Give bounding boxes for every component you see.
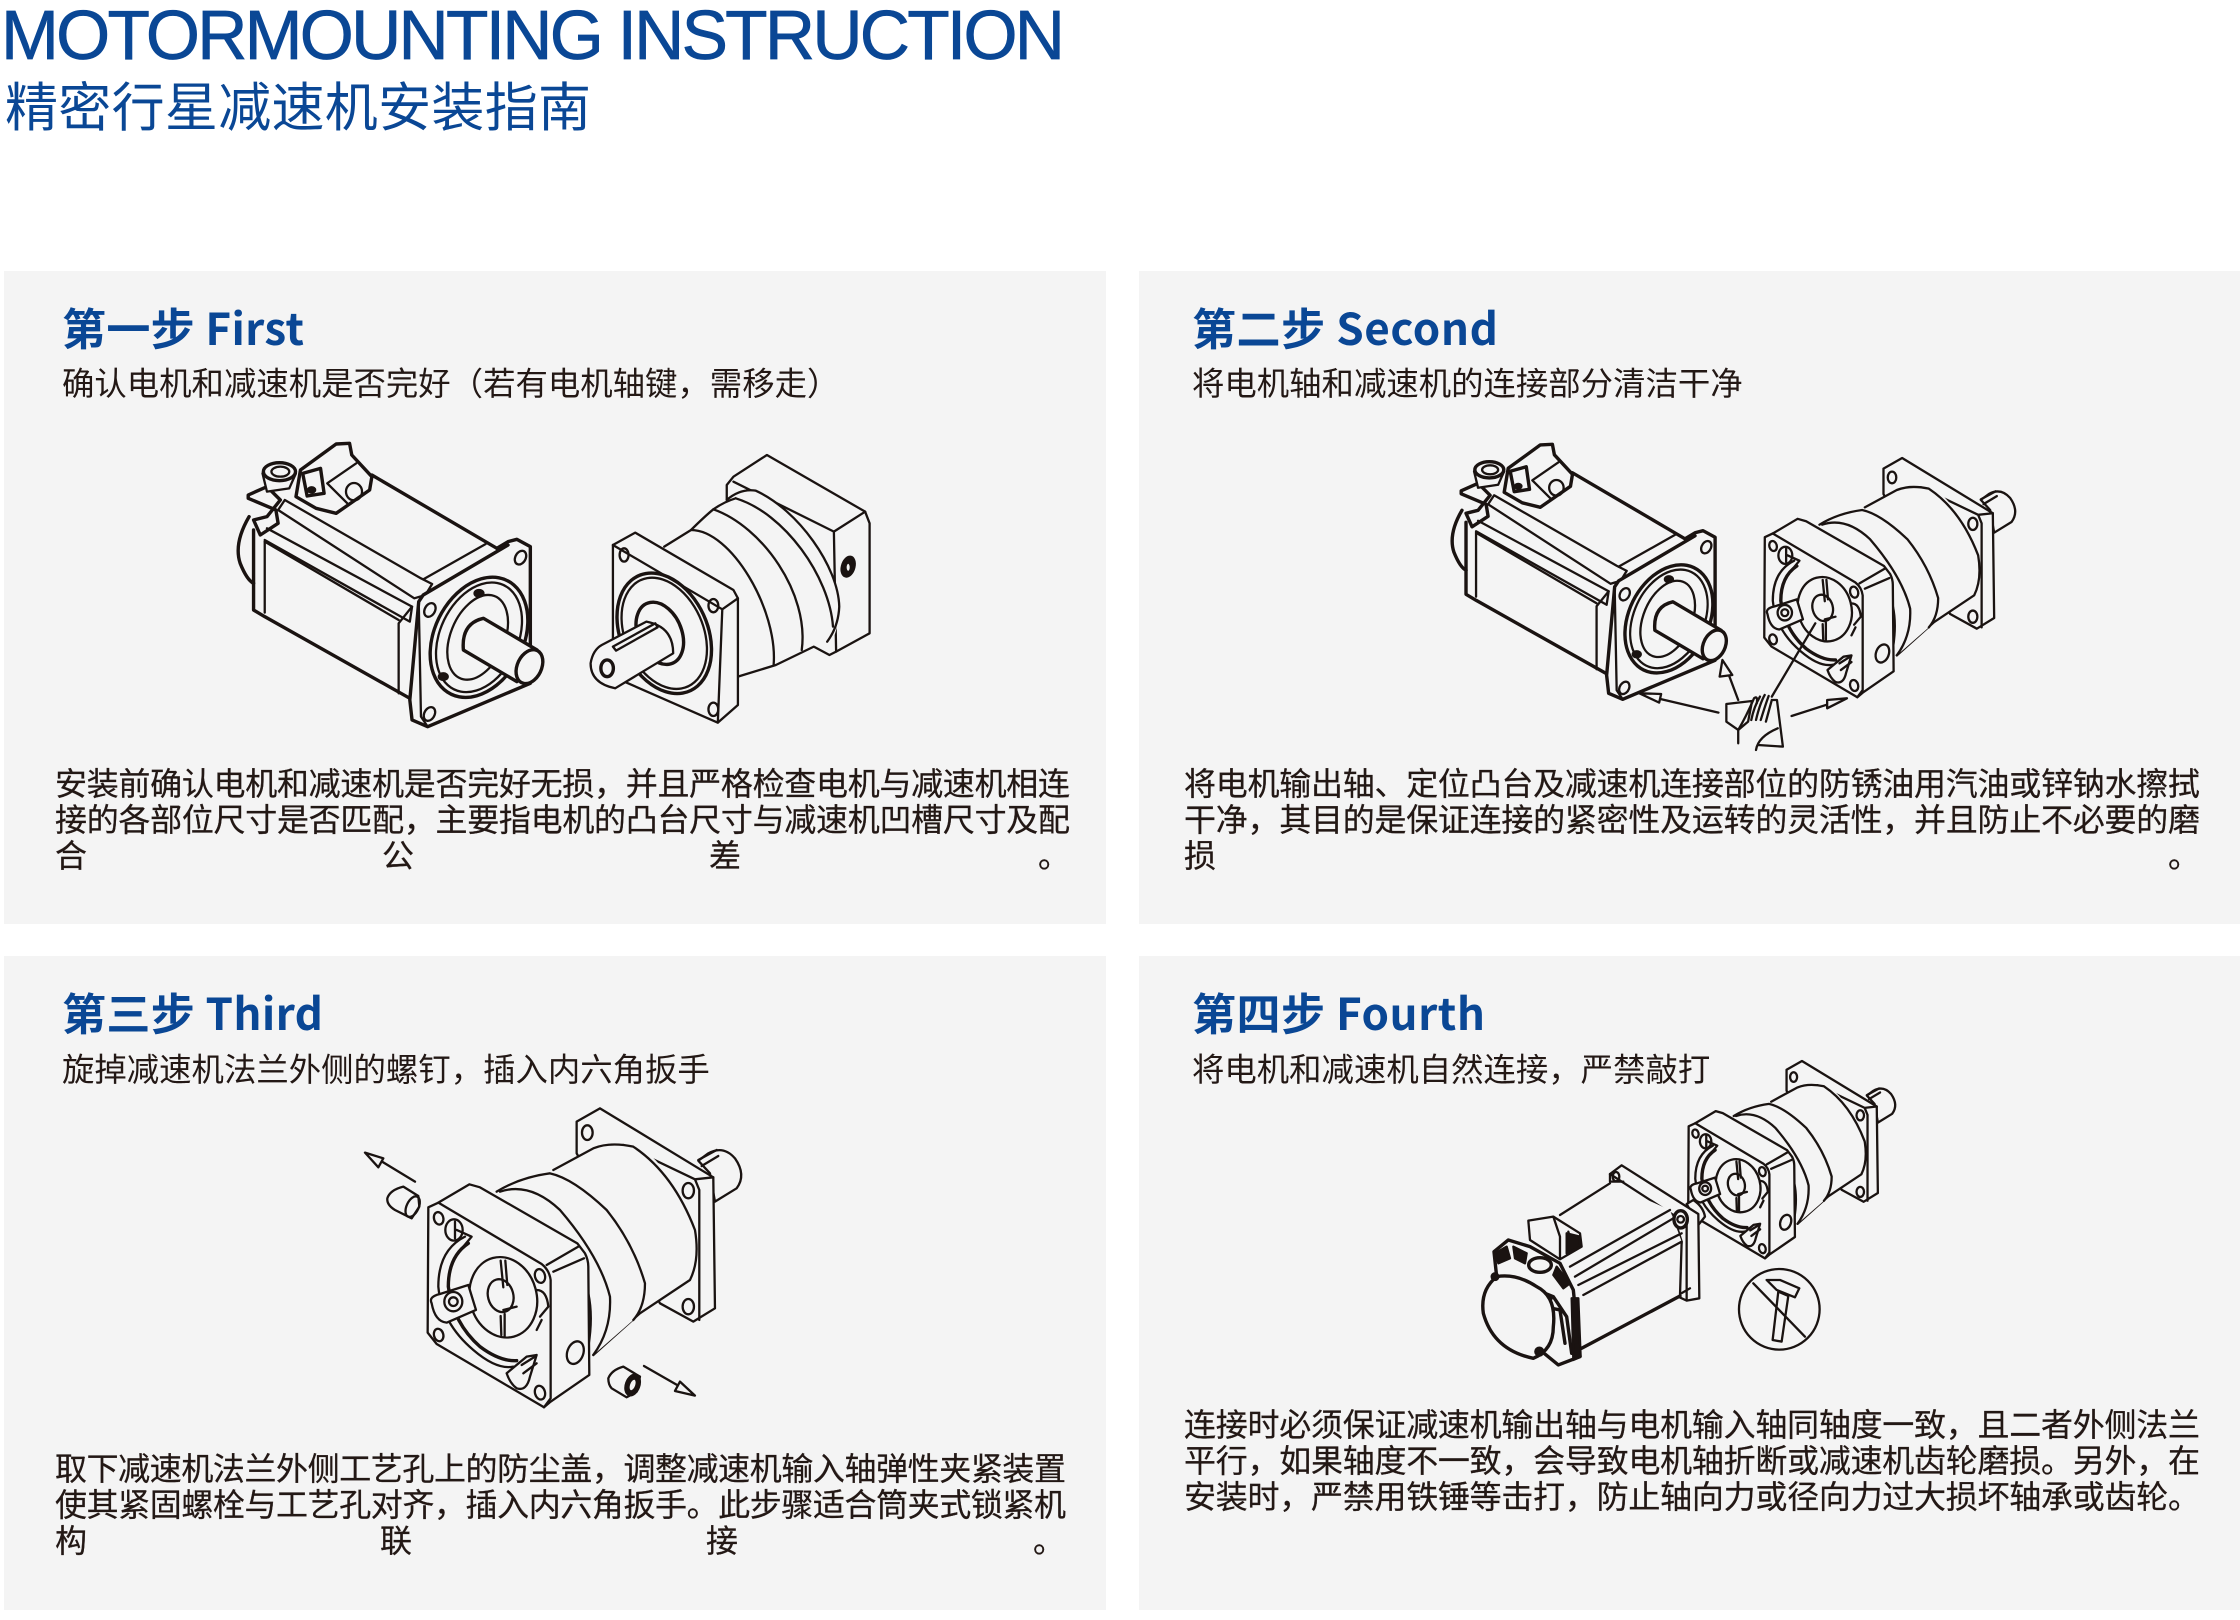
illustration: motor rear view xyxy=(1483,1165,1705,1365)
body text: step 3 xyxy=(55,1444,1066,1562)
body text: step 3: 。 xyxy=(1033,1516,1065,1562)
body text: step 4: 安装时，严禁用铁锤等击打，防止轴向力或径向力过大损坏轴承或齿轮。 xyxy=(1184,1472,2200,1518)
subheading: step 3: 旋掉减速机法兰外侧的螺钉，插入内六角扳手 xyxy=(62,1044,710,1091)
body text: step 2 xyxy=(1184,759,2200,877)
body text: step 3: 构 xyxy=(55,1516,87,1562)
body text: step 1: 合 xyxy=(55,831,87,877)
subheading: step 4: 将电机和减速机自然连接，严禁敲打 xyxy=(1192,1044,1710,1091)
body text: step 3: 联 xyxy=(380,1516,412,1562)
body text: step 2: 干净，其目的是保证连接的紧密性及运转的灵活性，并且防止不必要的磨 xyxy=(1184,795,2200,841)
heading: step 1: 第一步 First xyxy=(62,294,304,358)
illustration: reducer output side xyxy=(591,455,870,723)
body text: step 1: 差 xyxy=(709,831,741,877)
panel: step 4 xyxy=(1139,956,2240,1610)
illustration: reducer input side xyxy=(1764,458,2015,697)
body text: step 2: 损 xyxy=(1184,831,1216,877)
panel: step 2 xyxy=(1139,271,2240,924)
body text: step 3: 接 xyxy=(706,1516,738,1562)
illustration: motor xyxy=(1452,444,1730,699)
icon: upper dust cap and arrow xyxy=(365,1153,423,1219)
heading: step 2: 第二步 Second xyxy=(1192,294,1498,358)
body text: step 4: 连接时必须保证减速机输出轴与电机输入轴同轴度一致，且二者外侧法兰 xyxy=(1184,1400,2200,1446)
body text: step 1: 公 xyxy=(382,831,414,877)
illustration: reducer xyxy=(1688,1061,1895,1258)
icon: no hammering xyxy=(1739,1269,1820,1350)
subheading: step 1: 确认电机和减速机是否完好（若有电机轴键，需移走） xyxy=(62,358,839,405)
body text: step 2: 。 xyxy=(2168,831,2200,877)
heading: step 3: 第三步 Third xyxy=(62,979,323,1043)
illustration: motor xyxy=(238,443,547,727)
body text: step 1: 接的各部位尺寸是否匹配，主要指电机的凸台尺寸与减速机凹槽尺寸及配 xyxy=(55,795,1070,841)
subtitle: 精密行星减速机安装指南 xyxy=(5,66,591,142)
body text: step 2: 将电机输出轴、定位凸台及减速机连接部位的防锈油用汽油或锌钠水擦拭 xyxy=(1184,759,2200,805)
body text: step 1: 安装前确认电机和减速机是否完好无损，并且严格检查电机与减速机相连 xyxy=(55,759,1070,805)
body text: step 1: 。 xyxy=(1038,831,1070,877)
body text: step 1 xyxy=(55,759,1070,877)
body text: step 3: 使其紧固螺栓与工艺孔对齐，插入内六角扳手。此步骤适合筒夹式锁紧机 xyxy=(55,1480,1066,1526)
body text: step 4 xyxy=(1184,1400,2200,1518)
illustration: cleaning hand and arrows xyxy=(1639,623,1847,750)
icon: lower dust cap and arrow xyxy=(608,1366,695,1397)
subheading: step 2: 将电机轴和减速机的连接部分清洁干净 xyxy=(1192,358,1743,405)
panel: step 3 xyxy=(4,956,1106,1610)
illustration: reducer with arrows and dust caps xyxy=(365,1108,741,1407)
body text: step 3: 取下减速机法兰外侧工艺孔上的防尘盖，调整减速机输入轴弹性夹紧装置 xyxy=(55,1444,1066,1490)
body text: step 4: 平行，如果轴度不一致，会导致电机轴折断或减速机齿轮磨损。另外，在 xyxy=(1184,1436,2200,1482)
heading: step 4: 第四步 Fourth xyxy=(1192,979,1485,1043)
panel: step 1 xyxy=(4,271,1106,924)
